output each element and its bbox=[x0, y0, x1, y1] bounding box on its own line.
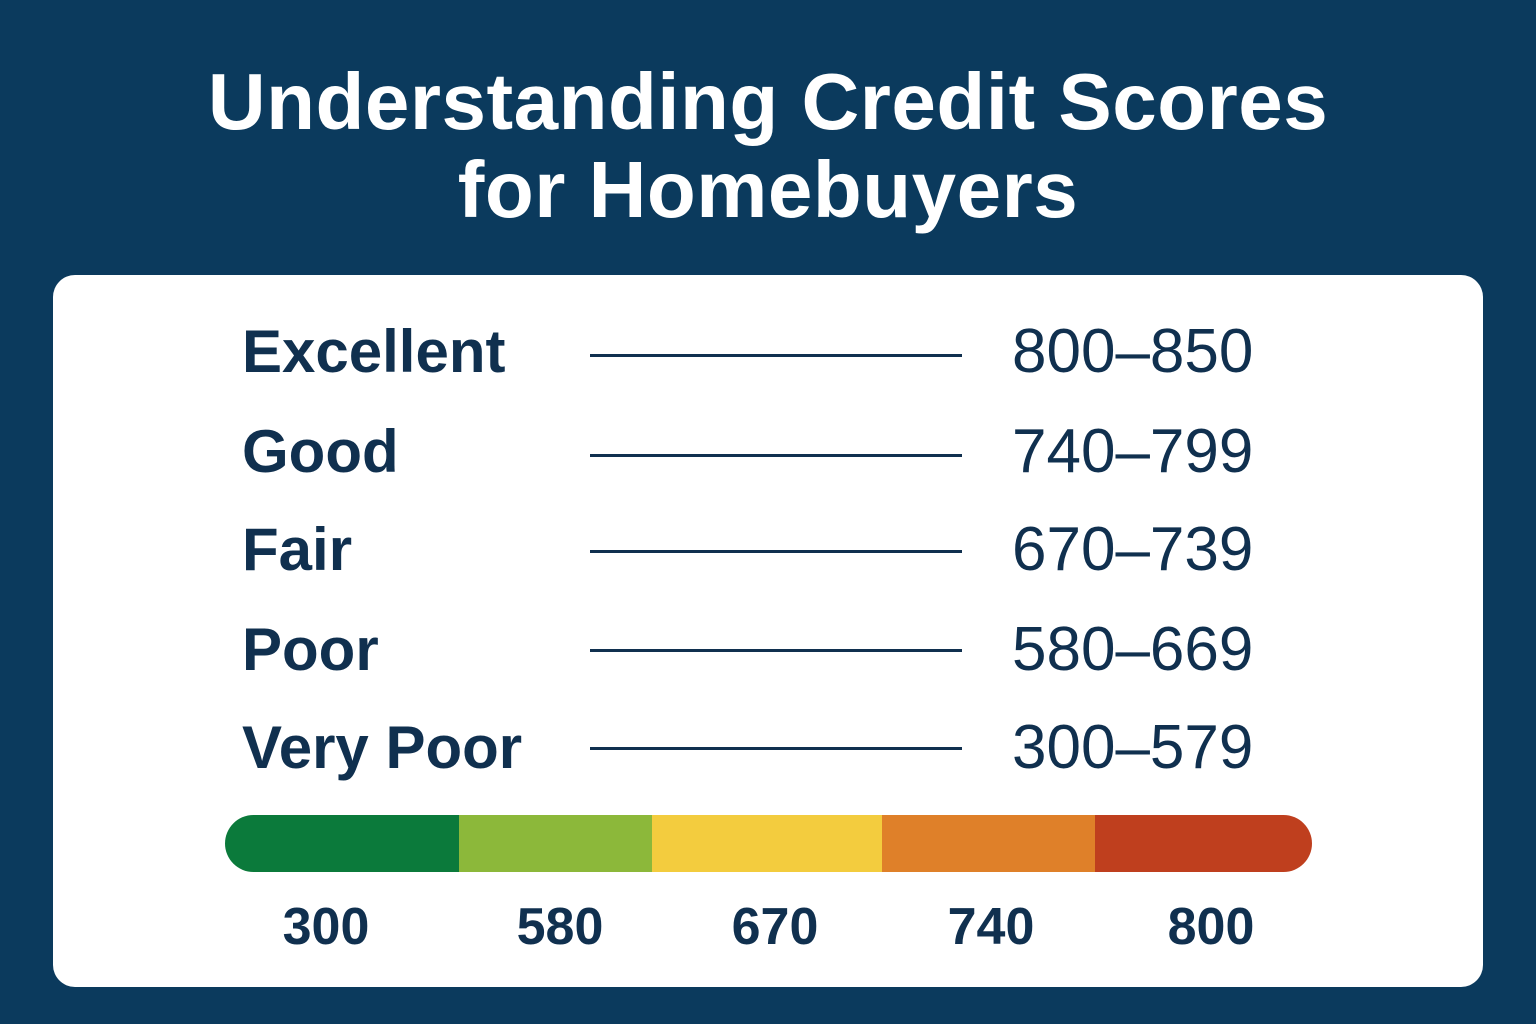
scale labels: 300 bbox=[283, 898, 369, 956]
row: Very Poor: 300–579 bbox=[1012, 713, 1253, 782]
row: Fair: Fair bbox=[242, 516, 352, 583]
panel: score table bbox=[53, 275, 1483, 987]
row: Good: Good bbox=[242, 418, 399, 485]
row: Poor: 580–669 bbox=[1012, 615, 1253, 684]
row: Fair bbox=[242, 515, 1253, 584]
color scale bar bbox=[225, 815, 1312, 872]
row: Very Poor bbox=[242, 713, 1253, 782]
row: Good bbox=[242, 417, 1253, 486]
row: Poor bbox=[242, 615, 1253, 684]
row: Excellent: 800–850 bbox=[1012, 317, 1253, 386]
scale labels: 740 bbox=[948, 898, 1034, 956]
scale labels: 670 bbox=[732, 898, 818, 956]
row: Fair: 670–739 bbox=[1012, 515, 1253, 584]
row: Excellent bbox=[242, 317, 1253, 386]
title: for Homebuyers bbox=[458, 145, 1078, 234]
title: Understanding Credit Scores bbox=[208, 57, 1328, 146]
row: Excellent: Excellent bbox=[242, 318, 505, 385]
scale labels: 580 bbox=[517, 898, 603, 956]
title bbox=[208, 57, 1328, 234]
row: Good: 740–799 bbox=[1012, 417, 1253, 486]
row: Poor: Poor bbox=[242, 616, 379, 683]
scale labels: 800 bbox=[1168, 898, 1254, 956]
scale labels bbox=[283, 898, 1254, 956]
row: Very Poor: Very Poor bbox=[242, 714, 522, 781]
